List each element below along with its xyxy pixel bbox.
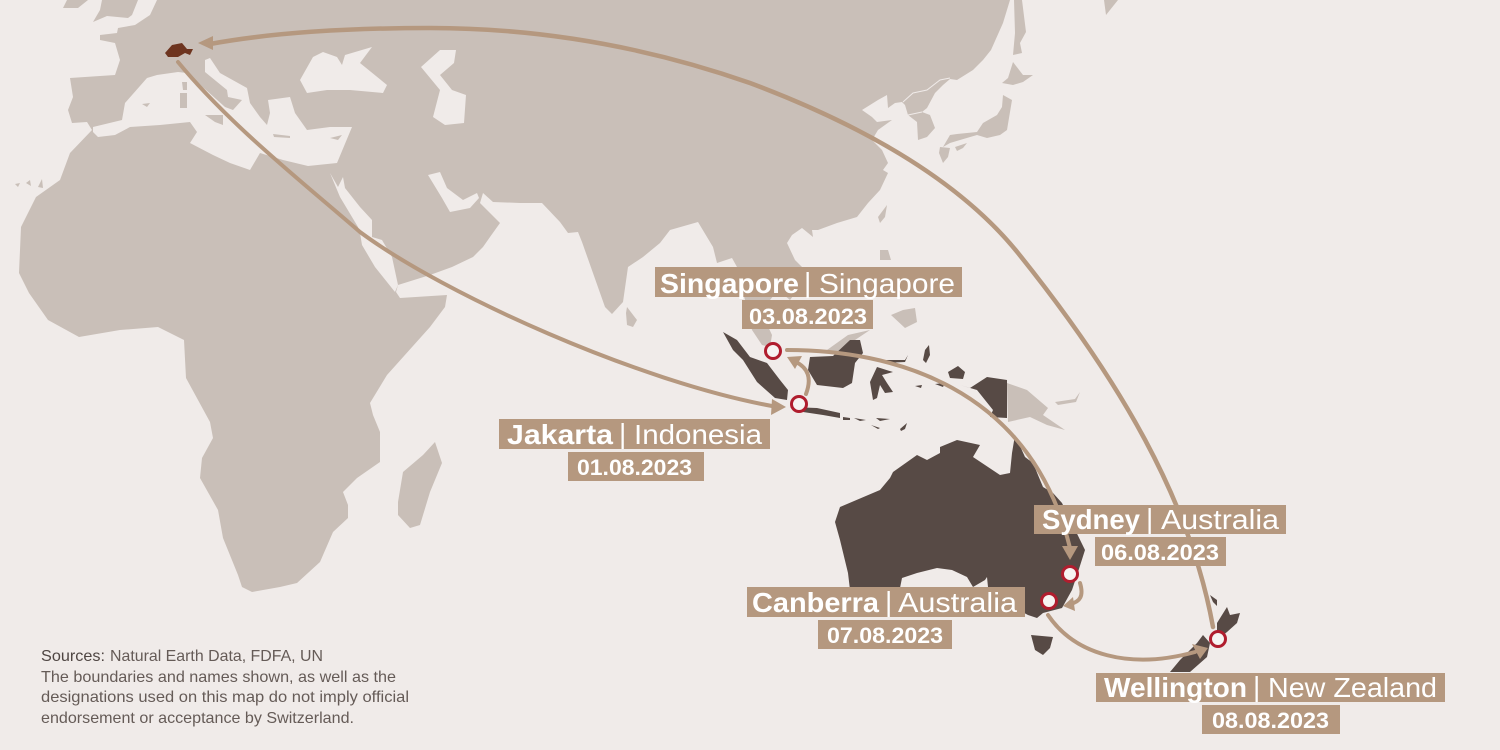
label: Wellington: New Zealand [1268,672,1437,703]
label: Wellington [1096,671,1445,734]
map: seas [93,47,479,292]
label: Sydney: | [1146,503,1153,534]
label: Jakarta: 01.08.2023 [577,455,692,480]
Sakhalin [1013,0,1026,55]
Eurasia and Africa landmass [19,0,1010,592]
location markers [766,344,1226,646]
Black Sea [300,47,387,93]
label: Canberra: Canberra [752,587,879,618]
Java [790,407,840,418]
Australia [835,435,1085,618]
label: Singapore [655,267,962,329]
label: Singapore: Singapore [660,268,799,299]
North Sulawesi and Moluccas [882,345,945,388]
arrow: Wellington to Switzerland [198,28,1213,627]
arrow: Singapore to Sydney [787,350,1078,560]
sources note: The boundaries and names shown, as well as the [41,669,396,686]
Red Sea [330,173,398,292]
islands drawn over the seas [15,82,342,188]
Hokkaido [1002,62,1033,85]
New Zealand south island [1170,635,1210,672]
map: destination countries [723,332,1240,672]
sources note: Natural Earth Data, FDFA, UN [110,648,323,665]
Kamchatka [1104,0,1118,15]
marker: Singapore [766,344,780,358]
arrow: Jakarta to Singapore [787,356,809,394]
label: Wellington: 08.08.2023 [1212,708,1329,733]
sources note: endorsement or acceptance by Switzerland. [41,710,354,727]
arrow: Sydney to Canberra [1063,583,1082,611]
arrow: Canberra to Wellington [1048,615,1208,660]
label: Canberra [747,586,1025,649]
label: Sydney: Australia [1161,504,1279,535]
Sumatra [723,332,788,400]
label: Sydney: Sydney [1042,504,1140,535]
sources note [41,648,409,727]
Sri Lanka [626,307,637,327]
sources note: designations used on this map do not imply official [41,689,409,706]
Borneo [808,340,863,388]
label: Wellington: Wellington [1104,672,1247,703]
New Guinea, Indonesian part [948,366,1007,418]
Persian Gulf [428,172,479,212]
label: Wellington: | [1253,671,1260,702]
label: Canberra: | [885,586,892,617]
label: Sydney [1034,503,1286,566]
label: Jakarta: | [619,418,626,449]
label: Singapore: Singapore [819,268,955,299]
Shikoku [955,143,967,151]
New Zealand north island [1210,595,1240,640]
marker: Jakarta [792,396,806,412]
Kyushu [939,147,950,163]
label: Singapore: | [804,267,811,298]
label: Canberra: Australia [898,587,1017,618]
Honshu [943,95,1012,147]
Mediterranean Sea [93,58,352,170]
Tasmania [1031,635,1053,655]
Canary islands [15,179,43,188]
Lesser Sunda islands [843,417,907,431]
label: Canberra: 07.08.2023 [827,623,943,648]
marker: Wellington [1210,632,1226,646]
Luzon [880,250,891,260]
Ireland [63,0,88,8]
Malaysian Borneo [827,330,870,355]
Sardinia and Corsica [180,82,187,108]
route arrows [178,28,1213,660]
Korea borders [903,78,950,115]
Sulawesi [870,367,893,400]
label: Singapore: 03.08.2023 [749,304,867,329]
icon: Switzerland [165,43,193,57]
Crete [273,134,290,138]
New Britain [1055,392,1080,405]
Sicily [205,115,223,125]
marker: Canberra [1042,594,1056,608]
Taiwan [878,205,887,223]
Caspian Sea [421,50,466,125]
label: Jakarta: Indonesia [634,419,762,450]
map: surrounding countries [19,0,1118,592]
Papua New Guinea [1007,383,1065,430]
label: Jakarta [499,418,770,481]
sources note: Sources: [41,648,105,665]
label: Sydney: 06.08.2023 [1101,540,1219,565]
Cyprus [330,135,342,140]
marker: Sydney [1062,566,1078,582]
arrow: Switzerland to Jakarta [178,62,786,415]
Madagascar [398,442,442,528]
Britain [93,0,138,22]
label: Jakarta: Jakarta [507,419,613,450]
Mindanao [891,308,917,328]
Balearic islands [142,103,150,107]
